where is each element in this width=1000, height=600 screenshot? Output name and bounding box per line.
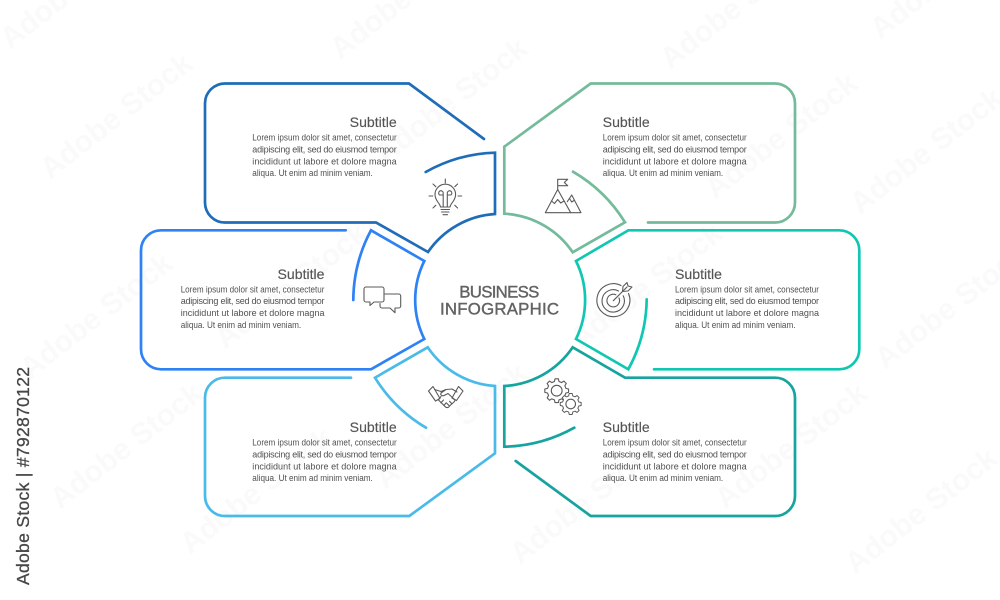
watermark pattern: Adobe Stock	[44, 376, 209, 516]
watermark pattern: Adobe Stock	[34, 46, 199, 186]
panel: middle right	[576, 230, 859, 369]
icon: gears	[545, 379, 581, 414]
panel: top right	[504, 84, 795, 252]
text block: top left: adipiscing elit, sed do eiusmod tempor	[252, 144, 397, 154]
text block: middle right: Lorem ipsum dolor sit amet, consectetur	[675, 284, 819, 294]
text block: middle right: aliqua. Ut enim ad minim veniam.	[675, 320, 796, 330]
center title	[440, 282, 559, 318]
text block: bottom right: aliqua. Ut enim ad minim veniam.	[603, 473, 723, 483]
outline: top right	[504, 84, 795, 252]
outline: middle left	[141, 230, 424, 369]
icon: mountain with flag	[545, 179, 581, 213]
center title: INFOGRAPHIC	[440, 299, 559, 318]
watermark pattern: Adobe Stock	[369, 31, 534, 171]
outline: middle right	[576, 230, 859, 369]
text block: middle left: Lorem ipsum dolor sit amet, consectetur	[181, 284, 324, 294]
text block: bottom right: incididunt ut labore et dolore magna	[603, 461, 747, 471]
text block: top right: incididunt ut labore et dolore magna	[603, 156, 747, 166]
watermark pattern: Adobe Stock	[699, 66, 864, 206]
text block: bottom left: adipiscing elit, sed do eiusmod tempor	[252, 450, 397, 460]
panel: bottom left	[205, 347, 495, 516]
text block: middle left	[181, 266, 325, 330]
text block: middle right: adipiscing elit, sed do eiusmod tempor	[675, 296, 819, 306]
text block: top right	[603, 114, 747, 178]
stock credit: Adobe Stock | #792870122	[13, 367, 33, 585]
text block: middle right: Subtitle	[675, 266, 722, 282]
text block: top left: Lorem ipsum dolor sit amet, consectetur	[252, 133, 397, 143]
icon: handshake	[428, 386, 463, 408]
text block: bottom left	[252, 419, 397, 483]
text block: middle left: adipiscing elit, sed do eiusmod tempor	[181, 296, 324, 306]
text block: middle right	[675, 266, 819, 330]
watermark pattern: Adobe Stock	[174, 421, 339, 561]
text block: bottom left: Lorem ipsum dolor sit amet, consectetur	[252, 438, 397, 448]
text block: top right: adipiscing elit, sed do eiusmod tempor	[603, 144, 747, 154]
watermark pattern: Adobe Stock	[504, 431, 669, 571]
panel: middle left	[141, 230, 424, 369]
text block: bottom left: Subtitle	[350, 419, 397, 435]
outline: top left	[205, 84, 495, 252]
text block: bottom left: aliqua. Ut enim ad minim veniam.	[252, 473, 373, 483]
text block: top right: Subtitle	[603, 114, 650, 130]
icon: speech bubbles	[364, 287, 401, 313]
watermark pattern: Adobe Stock	[369, 356, 534, 496]
text block: middle left: incididunt ut labore et dolore magna	[181, 308, 324, 318]
text block: middle left: aliqua. Ut enim ad minim veniam.	[181, 320, 301, 330]
text block: bottom left: incididunt ut labore et dolore magna	[252, 461, 397, 471]
outline: bottom right	[504, 347, 795, 516]
text block: top left: incididunt ut labore et dolore magna	[252, 156, 397, 166]
watermark pattern: Adobe Stock	[709, 376, 874, 516]
panel: top left	[205, 84, 495, 252]
watermark pattern: Adobe Stock	[564, 216, 729, 356]
watermark pattern: Adobe Stock	[839, 441, 1000, 581]
outline: bottom left	[205, 347, 495, 516]
text block: top right: Lorem ipsum dolor sit amet, consectetur	[603, 133, 747, 143]
text block: top left	[252, 114, 397, 178]
text block: bottom right: adipiscing elit, sed do eiusmod tempor	[603, 450, 747, 460]
panel: bottom right	[504, 347, 795, 516]
text block: middle right: incididunt ut labore et dolore magna	[675, 308, 819, 318]
text block: bottom right: Lorem ipsum dolor sit amet, consectetur	[603, 438, 747, 448]
icon: target with arrow	[597, 282, 632, 317]
text block: bottom right	[603, 419, 747, 483]
text block: top right: aliqua. Ut enim ad minim veniam.	[603, 168, 723, 178]
watermark pattern: Adobe Stock	[14, 246, 179, 386]
text block: top left: aliqua. Ut enim ad minim veniam.	[252, 168, 373, 178]
watermark pattern: Adobe Stock	[209, 216, 374, 356]
icon: light bulb	[429, 179, 462, 215]
text block: top left: Subtitle	[350, 114, 397, 130]
text block: bottom right: Subtitle	[603, 419, 650, 435]
text block: middle left: Subtitle	[278, 266, 325, 282]
center title: BUSINESS	[459, 282, 539, 301]
